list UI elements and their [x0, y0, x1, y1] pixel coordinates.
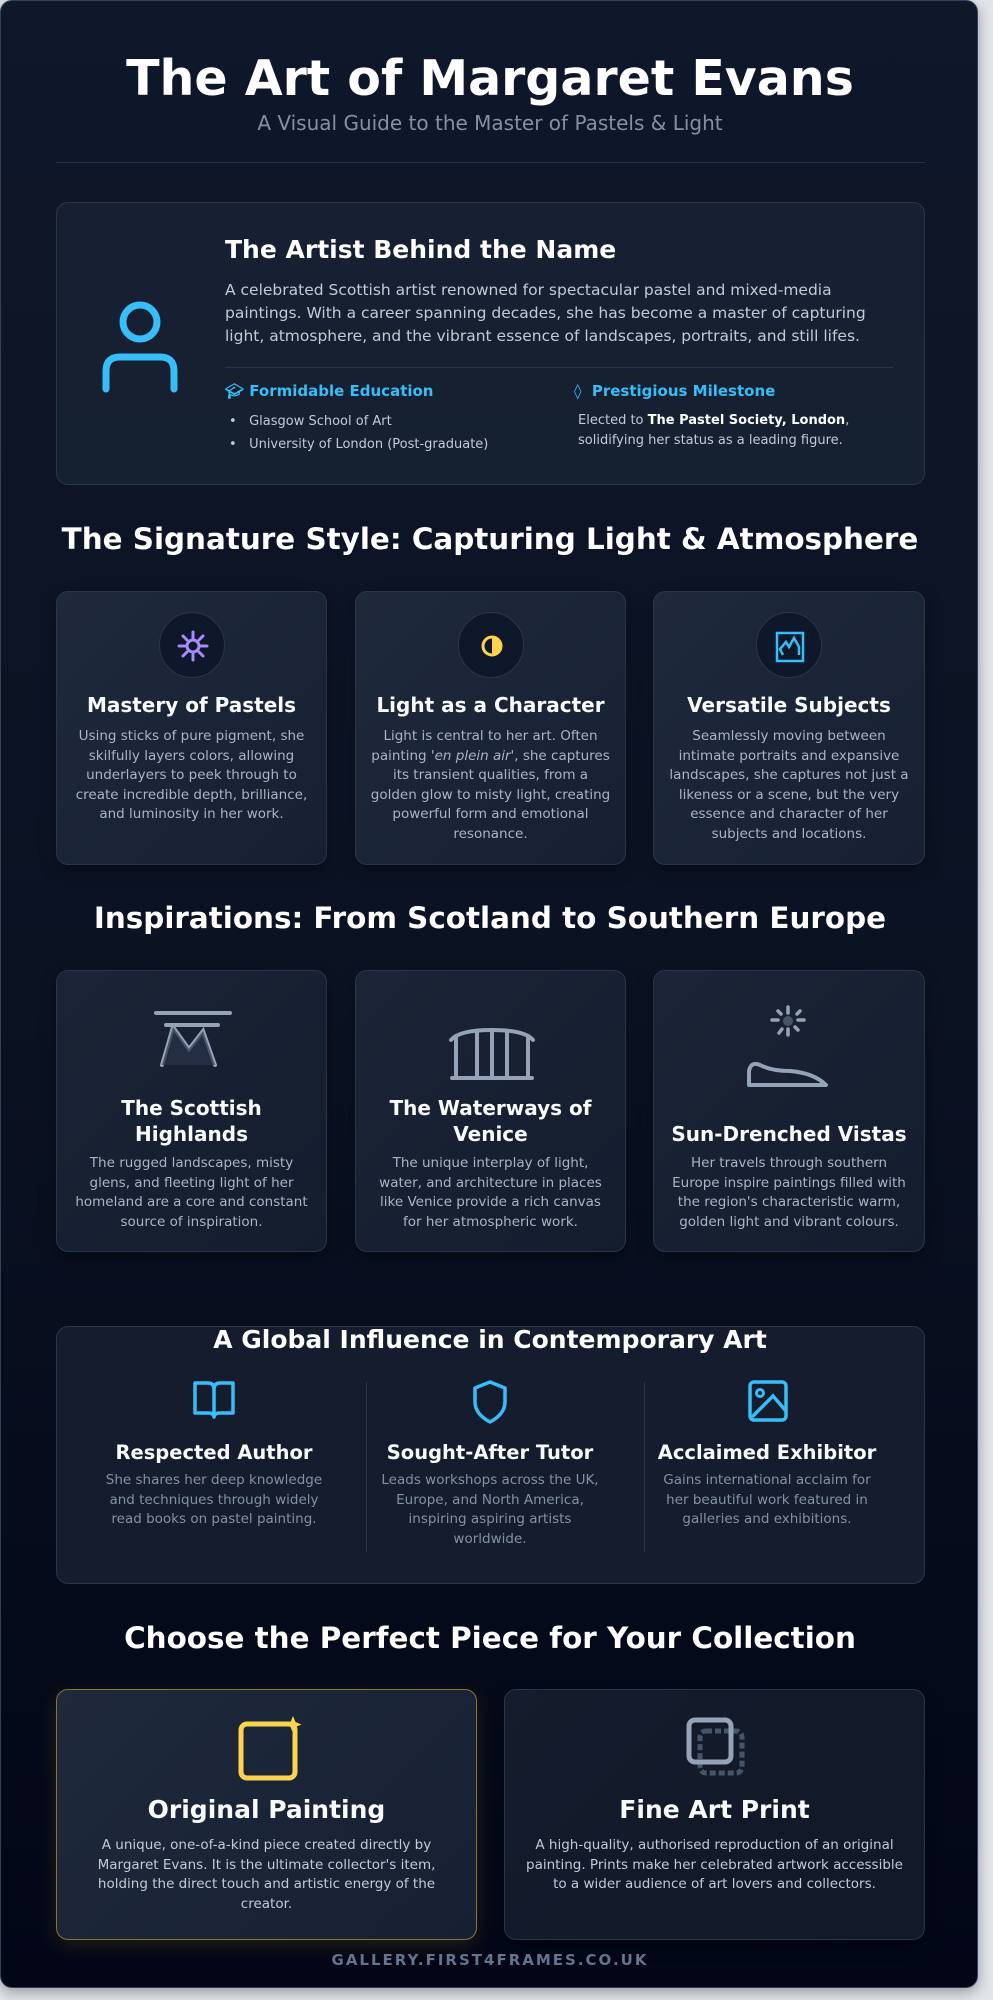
card: light as a character	[355, 591, 626, 865]
card: scottish highlands: The rugged landscapes, misty glens, and fleeting light of her homeland are a core and constant source of inspiration.	[75, 1155, 308, 1230]
card: light as a character: Light is central to her art. Often painting 'en plein air', she captures its transient qualities, from a golden glow to misty light, creating powerful form and emotional resonance.	[371, 728, 610, 842]
panel: global influence	[56, 1326, 925, 1584]
card: scottish highlands	[56, 970, 327, 1252]
card: sun-drenched vistas: Her travels through southern Europe inspire paintings filled with the region's characteristic warm, golden light and vibrant colours.	[672, 1155, 906, 1230]
card: fine art print	[504, 1689, 925, 1940]
card: scottish highlands: Highlands	[135, 1122, 248, 1146]
icon: person	[102, 302, 178, 392]
card: versatile subjects: Versatile Subjects	[687, 693, 891, 717]
icon: bridge	[449, 1028, 535, 1080]
card: light as a character: Light as a Character	[376, 693, 605, 717]
icon: book	[193, 1381, 235, 1419]
heading: The Artist Behind the Name	[225, 235, 616, 264]
icon: mountains	[154, 1011, 232, 1067]
card: versatile subjects	[653, 591, 925, 865]
card: mastery of pastels: Using sticks of pure pigment, she skilfully layers colors, allowing underlayers to peek through to create incredible depth, brilliance, and luminosity in her work.	[76, 728, 307, 822]
section heading: inspirations: Inspirations: From Scotland to Southern Europe	[94, 901, 886, 935]
card: original painting: Original Painting	[148, 1795, 385, 1824]
milestone	[574, 382, 849, 448]
icon: shield	[473, 1380, 507, 1424]
icon: half circle	[458, 612, 524, 678]
card: scottish highlands: The Scottish	[121, 1096, 262, 1120]
icon: framed picture	[756, 612, 822, 678]
bio text: A celebrated Scottish artist renowned for spectacular pastel and mixed-media paintings. With a career spanning decades, she has become a master of capturing light, atmosphere, and the vibrant essence of landscapes, portraits, and still lifes.	[225, 281, 866, 345]
card: mastery of pastels	[56, 591, 327, 865]
card: venice: The Waterways of	[390, 1096, 591, 1120]
card: venice: Venice	[453, 1122, 528, 1146]
card: fine art print: Fine Art Print	[619, 1795, 810, 1824]
card: versatile subjects: Seamlessly moving between intimate portraits and expansive landscapes, she captures not just a likeness or a scene, but the very essence and character of her subjects and locations.	[669, 728, 909, 842]
icon: image	[748, 1380, 788, 1422]
card: fine art print: A high-quality, authorised reproduction of an original painting. Prints make her celebrated artwork accessible to a wider audience of art lovers and collectors.	[526, 1837, 903, 1892]
card: venice: The unique interplay of light, water, and architecture in places like Venice provide a rich canvas for her atmospheric work.	[379, 1155, 602, 1230]
title: The Art of Margaret Evans	[126, 50, 854, 107]
section heading: choose: Choose the Perfect Piece for Your Collection	[124, 1621, 856, 1655]
card: sun-drenched vistas: Sun-Drenched Vistas	[671, 1122, 907, 1146]
card: original painting	[56, 1689, 477, 1940]
card: sun-drenched vistas	[653, 970, 925, 1252]
column: respected author: Respected Author	[115, 1441, 313, 1464]
panel: artist behind the name	[56, 202, 925, 485]
icon: sun	[159, 612, 225, 678]
card: venice	[355, 970, 626, 1252]
column: respected author: She shares her deep knowledge and techniques through widely read books on pastel painting.	[106, 1472, 322, 1527]
section heading: signature style: The Signature Style: Capturing Light & Atmosphere	[62, 522, 918, 556]
column: acclaimed exhibitor	[658, 1380, 876, 1527]
card: mastery of pastels: Mastery of Pastels	[87, 693, 296, 717]
milestone: Elected to The Pastel Society, London, solidifying her status as a leading figure.	[578, 413, 849, 448]
column: sought-after tutor: Leads workshops across the UK, Europe, and North America, inspiring aspiring artists worldwide.	[381, 1472, 599, 1547]
education: • Glasgow School of Art	[229, 414, 392, 429]
column: acclaimed exhibitor: Gains international acclaim for her beautiful work featured in galleries and exhibitions.	[663, 1472, 871, 1527]
column: sought-after tutor: Sought-After Tutor	[387, 1441, 593, 1464]
column: sought-after tutor	[381, 1380, 599, 1547]
education: 🎓︎ Formidable Education	[225, 382, 433, 400]
global heading: A Global Influence in Contemporary Art	[213, 1325, 767, 1354]
subtitle: A Visual Guide to the Master of Pastels & Light	[257, 111, 723, 135]
card: original painting: A unique, one-of-a-kind piece created directly by Margaret Evans. It is the ultimate collector's item, holding the direct touch and artistic energy of the creator.	[98, 1837, 435, 1912]
education: • University of London (Post-graduate)	[229, 437, 488, 452]
column: acclaimed exhibitor: Acclaimed Exhibitor	[658, 1441, 876, 1464]
icon: canvas with star	[238, 1716, 302, 1780]
footer: GALLERY.FIRST4FRAMES.CO.UK	[332, 1951, 648, 1969]
icon: stacked prints	[686, 1718, 744, 1776]
education	[225, 382, 488, 452]
milestone: ◊ Prestigious Milestone	[574, 382, 775, 400]
icon: sun and shore	[747, 1005, 828, 1087]
column: respected author	[106, 1381, 322, 1527]
